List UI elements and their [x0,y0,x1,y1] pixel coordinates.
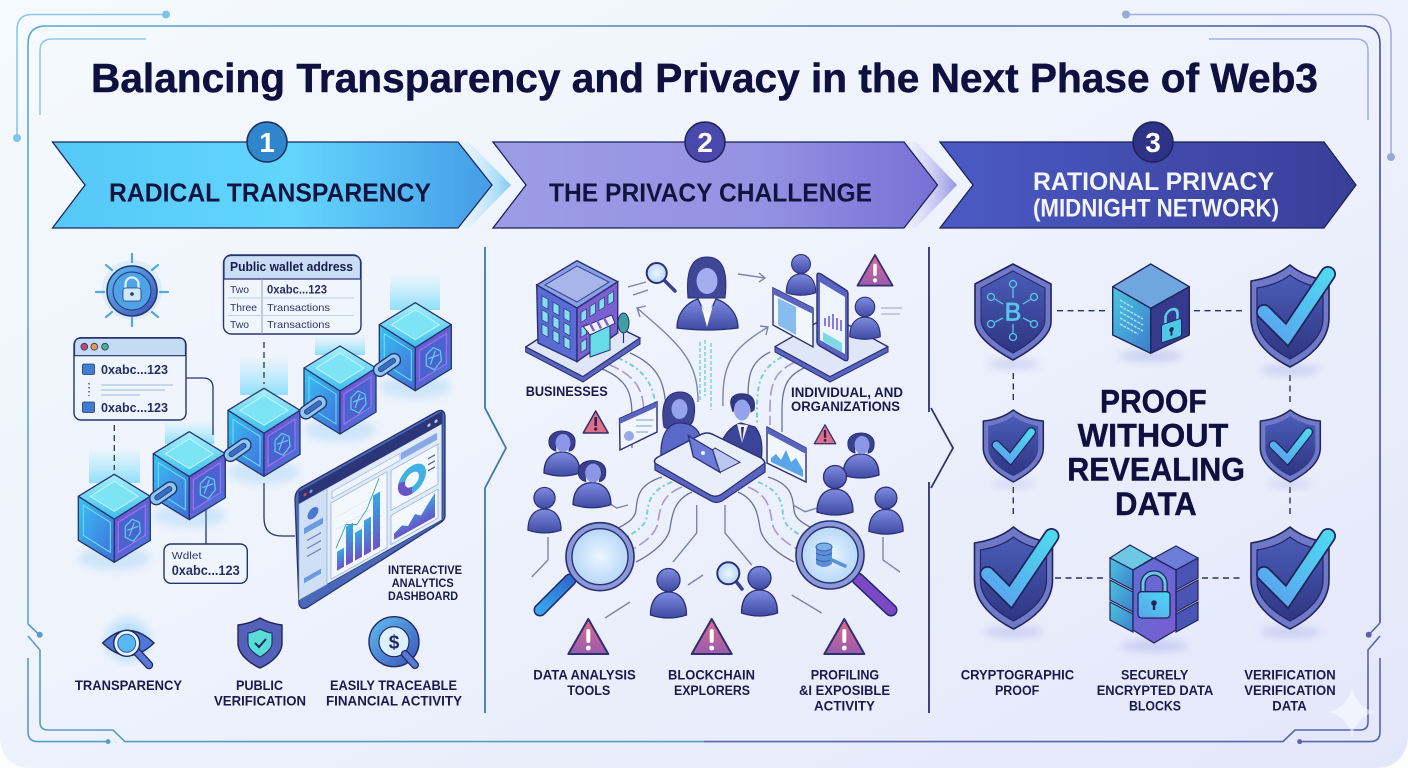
icon: large magnifier right with database [796,521,891,610]
callout: public wallet address table: Public wallet address [230,260,353,274]
text: blockchain explorers [668,668,755,698]
callout: public wallet address table: Two [230,319,249,331]
text: verification verification data: DATA [1272,699,1307,714]
data streams [532,273,902,618]
callout: wallet list window: 0xabc...123 [101,400,168,415]
header: step 1 radical transparency [52,122,511,228]
icon: warning profiling [824,619,864,654]
text: proof without revealing data: REVEALING [1067,452,1245,488]
header: step 1 radical transparency: 1 [259,127,275,158]
callout: public wallet address table: Two [230,284,249,296]
text: businesses: BUSINESSES [526,384,608,399]
header: step 3 rational privacy [940,122,1356,228]
text: cryptographic proof [961,668,1074,698]
text: dashboard label: DASHBOARD [388,591,458,603]
text: public verification: VERIFICATION [214,692,306,708]
text: transparency: TRANSPARENCY [75,677,183,693]
crowd: people left [528,431,611,533]
callout: public wallet address table: Transactions [267,319,330,331]
icon: warning blockchain [692,619,732,654]
callout: public wallet address table [224,255,361,334]
text: securely encrypted data blocks: BLOCKS [1129,699,1181,714]
text: verification verification data: VERIFICATION [1244,683,1336,698]
header: step 3 rational privacy: 3 [1145,127,1161,158]
icon: warning left [583,411,608,433]
text: profiling and exposible activity: ACTIVITY [814,699,875,714]
crowd: people bottom [650,566,778,618]
icon: magnifier top [647,263,675,291]
crowd: people right [817,433,903,534]
connector lines [114,342,295,545]
callout: wallet address: 0xabc...123 [172,563,240,578]
icon: encrypted cube [1113,264,1189,362]
icon: verified shield bottom right [1251,527,1329,638]
header: step 2 the privacy challenge: THE PRIVACY CHALLENGE [549,178,872,208]
blockchain: linked cubes [78,303,451,570]
callout: public wallet address table: Three [230,302,257,314]
panel: the privacy challenge [526,255,903,714]
title: Balancing Transparency and Privacy in the Next Phase of Web3 [91,55,1318,101]
icon: warning right [814,425,836,444]
text: data analysis tools [533,668,636,698]
header: step 1 radical transparency: RADICAL TRANSPARENCY [109,178,431,208]
icon: encrypted data blocks [1110,545,1198,652]
icon: traceable dollar magnifier [369,617,419,667]
callout: wallet list window: 0xabc...123 [101,362,168,377]
text: blockchain explorers: EXPLORERS [674,683,750,698]
text: securely encrypted data blocks: SECURELY [1121,668,1188,682]
text: public verification [214,677,306,708]
callout: wallet address [164,544,247,583]
text: data analysis tools: DATA ANALYSIS [533,668,636,682]
text: proof without revealing data: DATA [1115,486,1197,522]
text: individual and organizations [791,385,903,414]
text: proof without revealing data [1067,383,1245,522]
header: step 3 rational privacy: (MIDNIGHT NETWORK) [1033,194,1279,222]
dividers [485,247,953,713]
header: step 3 rational privacy: RATIONAL PRIVACY [1033,168,1274,196]
text: public verification: PUBLIC [236,677,283,693]
text: blockchain explorers: BLOCKCHAIN [668,668,755,682]
callout: wallet address: Wdlet [172,550,202,562]
text: dashboard label [388,565,462,603]
text: cryptographic proof: PROOF [995,683,1039,698]
figures and screens: individuals and organizations [773,255,888,382]
icon: small magnifier bottom [717,562,742,589]
text: verification verification data: VERIFICATION [1244,668,1336,682]
text: profiling and exposible activity: PROFILING [811,668,879,682]
callout: public wallet address table: 0xabc...123 [267,284,327,296]
figures: central desk with laptop [620,392,806,502]
icon: blockchain shield [975,264,1051,369]
icon: small shield left [983,410,1043,488]
text: proof without revealing data: WITHOUT [1078,418,1229,454]
icon: small shield right [1260,410,1320,488]
panel: radical transparency [74,254,463,708]
text: individual and organizations: ORGANIZATIONS [791,399,900,414]
icon: verified shield top right [1251,265,1329,376]
icon: warning data analysis [568,619,608,654]
text: cryptographic proof: CRYPTOGRAPHIC [961,668,1074,682]
text: data analysis tools: TOOLS [567,683,610,698]
text: easily traceable financial activity [326,677,463,708]
icon: large magnifier left [540,523,634,610]
icon: transparency eye [100,612,156,668]
chart: interactive analytics dashboard [295,410,445,608]
icon: sparkle watermark [1328,688,1376,736]
text: securely encrypted data blocks [1097,668,1214,714]
panel: rational privacy [961,264,1336,714]
icon: warning top right [857,255,893,286]
callout: public wallet address table: Transactions [267,302,330,314]
text: securely encrypted data blocks: ENCRYPTED DATA [1097,683,1214,698]
text: easily traceable financial activity: FINANCIAL ACTIVITY [326,692,463,708]
text: individual and organizations: INDIVIDUAL, AND [791,385,903,400]
callout: wallet list window [74,338,186,420]
text: profiling and exposible activity [799,668,890,714]
figure: woman top center [677,257,738,330]
text: dashboard label: ANALYTICS [392,578,454,590]
icon: verified shield bottom left [974,527,1052,638]
text: profiling and exposible activity: &I EXPOSIBLE [799,683,890,698]
header: step 2 the privacy challenge [493,122,957,228]
icon: padlock with rays [96,254,168,326]
icon: traceable dollar magnifier: $ [389,632,400,654]
dashed connectors [1013,311,1290,578]
header: step 2 the privacy challenge: 2 [697,127,713,158]
text: proof without revealing data: PROOF [1100,383,1207,419]
building: businesses [526,261,640,382]
text: dashboard label: INTERACTIVE [388,565,462,577]
icon: public verification shield [238,618,282,668]
text: easily traceable financial activity: EASILY TRACEABLE [330,677,457,693]
light beams [89,272,440,483]
icon: blockchain shield: B [1005,298,1021,326]
text: verification verification data [1244,668,1336,714]
